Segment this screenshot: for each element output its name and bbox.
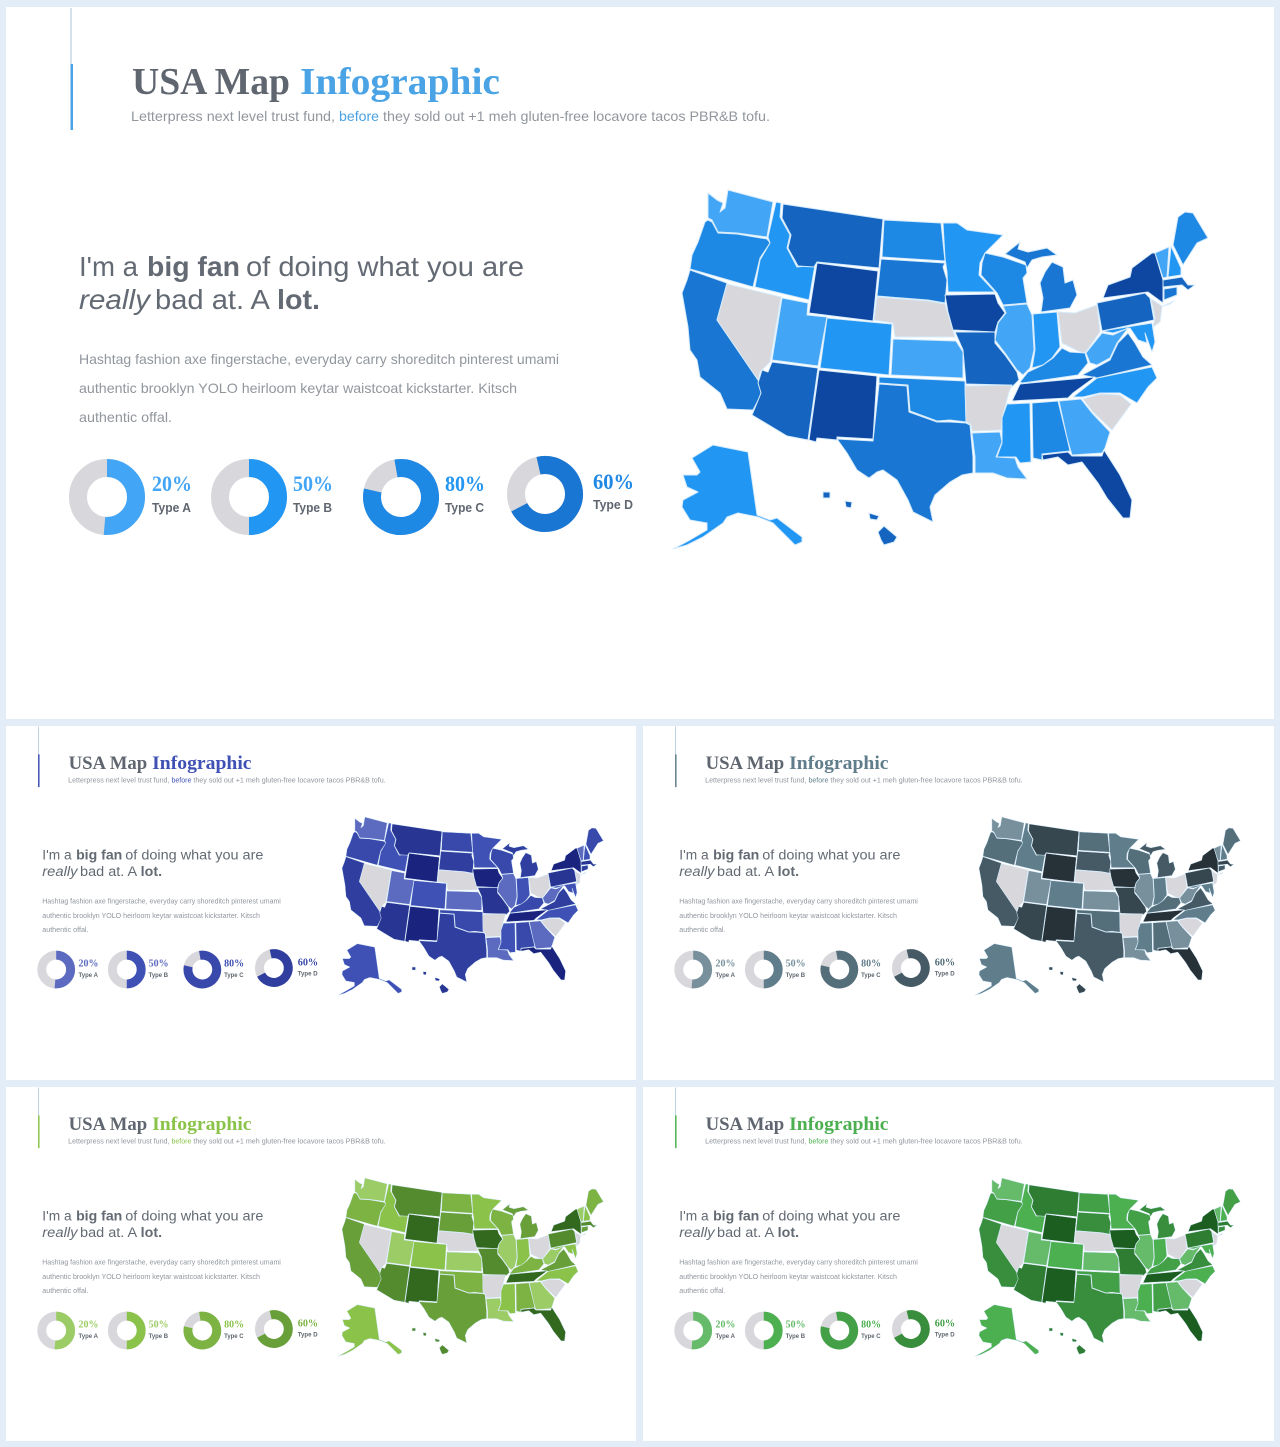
donut: Type B: Type B: [293, 501, 332, 515]
state: Michigan: [1005, 242, 1077, 312]
subtitle: Letterpress next level trust fund,: [131, 108, 335, 124]
donut: Type A: [679, 1316, 735, 1345]
body text: [79, 351, 559, 425]
state: Massachusetts: [1163, 277, 1195, 290]
donut: Type C: Type C: [224, 972, 244, 979]
state: Long Island: [1163, 301, 1174, 306]
state: South Carolina: [1083, 394, 1131, 430]
accent line: [675, 726, 677, 787]
donut: Type D: 60%: [935, 957, 955, 969]
title: USA Map: [69, 1114, 147, 1135]
heading: bad at. A: [80, 1224, 138, 1240]
donut: Type A: Type A: [716, 972, 735, 979]
donut: Type C: Type C: [861, 1333, 881, 1340]
donut: Type D: Type D: [935, 1331, 955, 1338]
subtitle: before: [809, 778, 829, 785]
heading: really: [679, 863, 716, 879]
donut: Type B: 50%: [149, 1319, 169, 1331]
USA choropleth map: [673, 190, 1208, 549]
heading: lot.: [778, 1224, 799, 1240]
donut: Type A: 20%: [716, 1319, 735, 1331]
subtitle: [68, 1139, 386, 1146]
state: West Virginia: [1086, 328, 1128, 365]
heading: lot.: [141, 863, 162, 879]
title: [69, 1114, 252, 1135]
state: New York: [1103, 253, 1163, 303]
title: [706, 1114, 889, 1135]
state: Tennessee: [1012, 377, 1095, 401]
title: [69, 753, 252, 774]
subtitle: [131, 108, 770, 124]
state: Idaho: [755, 202, 815, 300]
heading: really: [679, 1224, 716, 1240]
panel: indigo slide: [6, 726, 636, 1080]
donut: Type D: [894, 951, 955, 985]
state: Vermont: [1155, 247, 1169, 278]
body text: authentic offal.: [79, 409, 172, 425]
state: Mississippi: [997, 403, 1031, 463]
subtitle: before: [172, 778, 192, 785]
donut: Type D: [510, 459, 634, 529]
title: [706, 753, 889, 774]
heading: of doing what you are: [125, 1208, 264, 1224]
subtitle: Letterpress next level trust fund,: [68, 1139, 170, 1146]
heading: of doing what you are: [762, 1208, 901, 1224]
donut: Type D: Type D: [593, 498, 633, 512]
state: Virginia: [1082, 333, 1152, 378]
donut: Type A: [42, 1316, 98, 1345]
donut: Type C: 80%: [224, 1319, 244, 1331]
state: Oklahoma: [879, 377, 966, 422]
donut: Type B: [749, 1316, 806, 1345]
state: Maine: [1173, 212, 1208, 265]
subtitle: before: [339, 108, 379, 124]
state: Colorado: [820, 318, 892, 375]
heading: I'm a: [42, 847, 72, 863]
body text: authentic brooklyn YOLO heirloom keytar waistcoat kickstarter. Kitsch: [42, 1274, 260, 1281]
title: Infographic: [300, 61, 500, 103]
state: South Dakota: [877, 259, 947, 303]
donut: Type B: 50%: [786, 1319, 806, 1331]
heading: big fan: [76, 1208, 122, 1224]
donut: Type D: Type D: [935, 970, 955, 977]
heading: really: [79, 284, 152, 315]
subtitle: they sold out +1 meh gluten-free locavore tacos PBR&B tofu.: [193, 778, 386, 785]
state: Nevada: [717, 284, 781, 380]
body text: Hashtag fashion axe fingerstache, everyday carry shoreditch pinterest umami: [42, 1259, 281, 1266]
heading: of doing what you are: [246, 251, 524, 282]
donut: Type A: 20%: [152, 471, 192, 496]
donut: Type B: 50%: [293, 471, 333, 496]
USA choropleth map: [975, 817, 1240, 995]
heading: bad at. A: [155, 284, 270, 315]
heading: [42, 847, 264, 879]
heading: bad at. A: [717, 863, 775, 879]
donut: Type B: [220, 468, 333, 526]
donut: Type C: [823, 1314, 881, 1347]
state: Montana: [782, 204, 883, 268]
donut: Type C: 80%: [224, 958, 244, 970]
subtitle: [705, 778, 1023, 785]
state: Pennsylvania: [1097, 293, 1154, 331]
heading: lot.: [141, 1224, 162, 1240]
panel: light green slide: [6, 1087, 636, 1441]
donut: Type A: 20%: [79, 958, 98, 970]
body text: Hashtag fashion axe fingerstache, everyday carry shoreditch pinterest umami: [679, 1259, 918, 1266]
state: Louisiana: [972, 432, 1027, 479]
accent line: [675, 1087, 677, 1148]
title: Infographic: [152, 1114, 252, 1135]
state: Missouri: [955, 332, 1019, 387]
panel: blue-grey slide: [643, 726, 1274, 1080]
heading: big fan: [147, 251, 240, 282]
subtitle: before: [809, 1139, 829, 1146]
accent line: [70, 8, 73, 130]
body text: authentic offal.: [679, 1288, 726, 1295]
body text: authentic brooklyn YOLO heirloom keytar waistcoat kickstarter. Kitsch: [79, 380, 517, 396]
heading: big fan: [713, 1208, 759, 1224]
heading: of doing what you are: [762, 847, 901, 863]
state: Wyoming: [809, 263, 878, 321]
title: USA Map: [132, 61, 290, 103]
heading: I'm a: [679, 847, 709, 863]
subtitle: Letterpress next level trust fund,: [68, 778, 170, 785]
state: Hawaii: [823, 492, 897, 545]
heading: I'm a: [42, 1208, 72, 1224]
donut: Type A: Type A: [716, 1333, 735, 1340]
donut: Type A: Type A: [152, 501, 191, 515]
heading: bad at. A: [80, 863, 138, 879]
state: Wisconsin: [981, 253, 1027, 305]
donut: Type B: [112, 955, 169, 984]
subtitle: [705, 1139, 1023, 1146]
body text: authentic offal.: [679, 927, 726, 934]
USA choropleth map: [975, 1178, 1240, 1356]
donut: Type D: 60%: [298, 957, 318, 969]
heading: [679, 1208, 901, 1240]
donut: Type A: 20%: [79, 1319, 98, 1331]
state: Arkansas: [965, 385, 1012, 431]
title: Infographic: [789, 753, 889, 774]
state: Kentucky: [1020, 348, 1088, 383]
subtitle: they sold out +1 meh gluten-free locavore tacos PBR&B tofu.: [830, 1139, 1023, 1146]
donut: Type C: [367, 463, 485, 531]
subtitle: [68, 778, 386, 785]
title: USA Map: [706, 753, 784, 774]
panel: main blue slide: [6, 7, 1274, 719]
title: Infographic: [152, 753, 252, 774]
subtitle: they sold out +1 meh gluten-free locavore tacos PBR&B tofu.: [383, 108, 770, 124]
state: Alaska: [673, 445, 802, 549]
donut: Type A: Type A: [79, 972, 98, 979]
subtitle: they sold out +1 meh gluten-free locavore tacos PBR&B tofu.: [830, 778, 1023, 785]
body text: Hashtag fashion axe fingerstache, everyday carry shoreditch pinterest umami: [79, 351, 559, 367]
heading: big fan: [713, 847, 759, 863]
donut: Type A: Type A: [79, 1333, 98, 1340]
body text: authentic offal.: [42, 927, 89, 934]
body text: [679, 898, 918, 934]
body text: authentic brooklyn YOLO heirloom keytar waistcoat kickstarter. Kitsch: [679, 913, 897, 920]
donut: Type B: [112, 1316, 169, 1345]
body text: Hashtag fashion axe fingerstache, everyday carry shoreditch pinterest umami: [679, 898, 918, 905]
donut: Type C: 80%: [445, 471, 485, 496]
state: Arizona: [752, 362, 818, 440]
heading: really: [42, 1224, 79, 1240]
state: Georgia: [1059, 399, 1110, 455]
donut: Type A: [78, 468, 192, 526]
donut: Type B: Type B: [786, 972, 806, 979]
state: Oregon: [690, 220, 770, 287]
subtitle: Letterpress next level trust fund,: [705, 1139, 807, 1146]
donut: Type A: 20%: [716, 958, 735, 970]
donut: Type B: 50%: [786, 958, 806, 970]
state: Washington: [708, 190, 773, 237]
donut: Type D: [257, 951, 318, 985]
state: Minnesota: [943, 223, 1003, 292]
donut: Type B: Type B: [149, 972, 169, 979]
heading: big fan: [76, 847, 122, 863]
donut: Type C: 80%: [861, 1319, 881, 1331]
accent line: [38, 1087, 40, 1148]
body text: Hashtag fashion axe fingerstache, everyday carry shoreditch pinterest umami: [42, 898, 281, 905]
heading: bad at. A: [717, 1224, 775, 1240]
donut: Type D: 60%: [935, 1318, 955, 1330]
body text: [42, 898, 281, 934]
body text: [679, 1259, 918, 1295]
state: North Carolina: [1073, 367, 1157, 403]
donut: Type B: 50%: [149, 958, 169, 970]
subtitle: before: [172, 1139, 192, 1146]
donut: Type C: Type C: [445, 501, 484, 515]
body text: [42, 1259, 281, 1295]
state: Iowa: [945, 294, 1005, 332]
donut: Type B: Type B: [786, 1333, 806, 1340]
donut: Type D: Type D: [298, 1331, 318, 1338]
state: Ohio: [1058, 305, 1100, 353]
body text: authentic brooklyn YOLO heirloom keytar waistcoat kickstarter. Kitsch: [679, 1274, 897, 1281]
donut: Type D: [894, 1312, 955, 1346]
state: Kansas: [891, 339, 963, 378]
donut: Type B: [749, 955, 806, 984]
donut: Type D: [257, 1312, 318, 1346]
state: New Mexico: [809, 370, 877, 442]
heading: [42, 1208, 264, 1240]
state: Indiana: [1032, 312, 1060, 368]
heading: I'm a: [79, 251, 138, 282]
title: Infographic: [789, 1114, 889, 1135]
title: [132, 61, 500, 103]
state: California: [682, 270, 762, 410]
title: USA Map: [706, 1114, 784, 1135]
heading: really: [42, 863, 79, 879]
state: Utah: [772, 298, 827, 366]
subtitle: Letterpress next level trust fund,: [705, 778, 807, 785]
state: Connecticut and Rhode Island: [1164, 287, 1177, 300]
donut: Type C: [823, 953, 881, 986]
accent line: [38, 726, 40, 787]
donut: Type B: Type B: [149, 1333, 169, 1340]
state: Alabama: [1032, 401, 1070, 460]
state: New Hampshire: [1168, 246, 1181, 277]
subtitle: they sold out +1 meh gluten-free locavore tacos PBR&B tofu.: [193, 1139, 386, 1146]
donut: Type D: 60%: [298, 1318, 318, 1330]
state: New Jersey: [1151, 299, 1162, 327]
state: Nebraska: [874, 297, 955, 337]
state: Maryland and Delaware: [1102, 323, 1155, 352]
heading: lot.: [778, 863, 799, 879]
heading: I'm a: [679, 1208, 709, 1224]
donut: Type A: [42, 955, 98, 984]
state: Illinois: [995, 304, 1034, 375]
body text: authentic brooklyn YOLO heirloom keytar waistcoat kickstarter. Kitsch: [42, 913, 260, 920]
state: North Dakota: [882, 220, 945, 261]
donut: Type C: [186, 953, 244, 986]
USA choropleth map: [338, 1178, 603, 1356]
heading: [79, 251, 524, 315]
donut: Type C: [186, 1314, 244, 1347]
heading: of doing what you are: [125, 847, 264, 863]
donut: Type D: 60%: [593, 469, 634, 494]
body text: authentic offal.: [42, 1288, 89, 1295]
state: Texas: [837, 384, 973, 522]
donut: Type C: Type C: [224, 1333, 244, 1340]
panel: green slide: [643, 1087, 1274, 1441]
heading: [679, 847, 901, 879]
donut: Type C: Type C: [861, 972, 881, 979]
donut: Type C: 80%: [861, 958, 881, 970]
USA choropleth map: [338, 817, 603, 995]
heading: lot.: [277, 284, 320, 315]
title: USA Map: [69, 753, 147, 774]
state: Florida: [1042, 450, 1132, 518]
donut: Type D: Type D: [298, 970, 318, 977]
donut: Type A: [679, 955, 735, 984]
